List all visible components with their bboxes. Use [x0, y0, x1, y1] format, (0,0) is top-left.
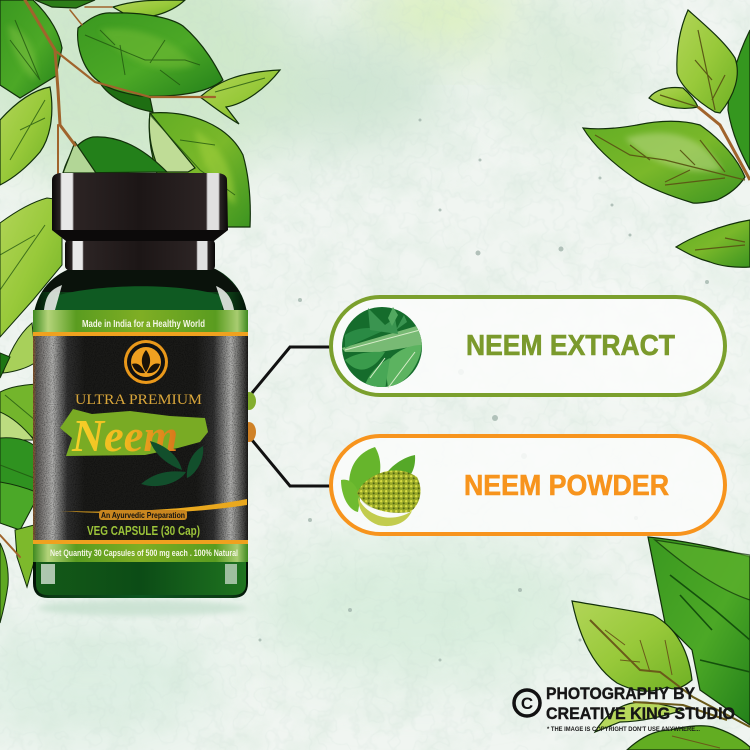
orange stripe bottom — [33, 540, 248, 544]
black label — [33, 336, 248, 541]
label: neem extract: NEEM EXTRACT — [466, 330, 675, 362]
net quantity text: Net Quantity 30 Capsules of 500 mg each . 100% Natural — [50, 548, 238, 558]
bottle neck — [65, 240, 215, 270]
connector dot: orange — [242, 422, 256, 442]
leaves: top left branch — [0, 0, 280, 227]
bottle shoulder glass — [55, 286, 222, 310]
made in india text: Made in India for a Healthy World — [82, 318, 205, 330]
bottle shoulder dark — [42, 268, 240, 292]
credit line two: CREATIVE KING STUDIO — [546, 704, 735, 723]
branch: top right stem — [698, 107, 750, 180]
lower glass — [36, 562, 246, 595]
neem leaf sprig — [141, 441, 203, 486]
label top band — [33, 310, 248, 333]
product bottle — [33, 173, 248, 598]
shoulder highlights — [44, 285, 234, 310]
orange stripe top — [33, 332, 248, 336]
cap rim — [52, 230, 228, 241]
pill: neem powder — [331, 436, 725, 534]
credit line one: PHOTOGRAPHY BY — [546, 684, 696, 703]
icon: neem powder bowl — [341, 447, 421, 526]
green brush stroke — [60, 409, 208, 456]
logo emblem — [124, 340, 168, 384]
leaf veins and stems: bottom right — [590, 575, 750, 748]
connector dot: green — [242, 392, 256, 410]
leaf highlight: top right — [625, 133, 722, 171]
bottle reflection — [37, 600, 247, 616]
photography credit — [514, 684, 735, 733]
pill: neem extract — [331, 297, 725, 395]
copyright notice: * THE IMAGE IS COPYRIGHT DON'T USE ANYWHERE... — [547, 726, 700, 733]
copyright symbol — [514, 690, 540, 716]
bottle cap — [52, 173, 228, 241]
gold swoosh — [60, 499, 247, 513]
connector lines — [252, 347, 330, 486]
bottle body glass — [33, 268, 248, 598]
ayurvedic tag: An Ayurvedic Preparation — [101, 510, 185, 520]
leaves: top right branch — [583, 10, 750, 267]
icon: neem leaves — [342, 307, 422, 390]
ultra premium text: ULTRA PREMIUM — [75, 392, 202, 408]
label grain — [33, 336, 248, 541]
veg capsule text: VEG CAPSULE (30 Cap) — [87, 523, 200, 538]
leaf highlights: top left — [8, 25, 235, 205]
leaf veins: top right — [595, 30, 745, 250]
copyright symbol: C — [521, 694, 533, 713]
lower glass highlights — [41, 564, 237, 584]
neem title: Neem — [71, 410, 178, 461]
leaf veins: top left — [0, 20, 265, 478]
branch: top left stems — [0, 0, 215, 557]
bottom band — [33, 544, 248, 562]
leaves: bottom right branch — [572, 537, 750, 750]
leaves: left edge behind bottle — [0, 198, 62, 623]
label: neem powder: NEEM POWDER — [464, 470, 669, 502]
